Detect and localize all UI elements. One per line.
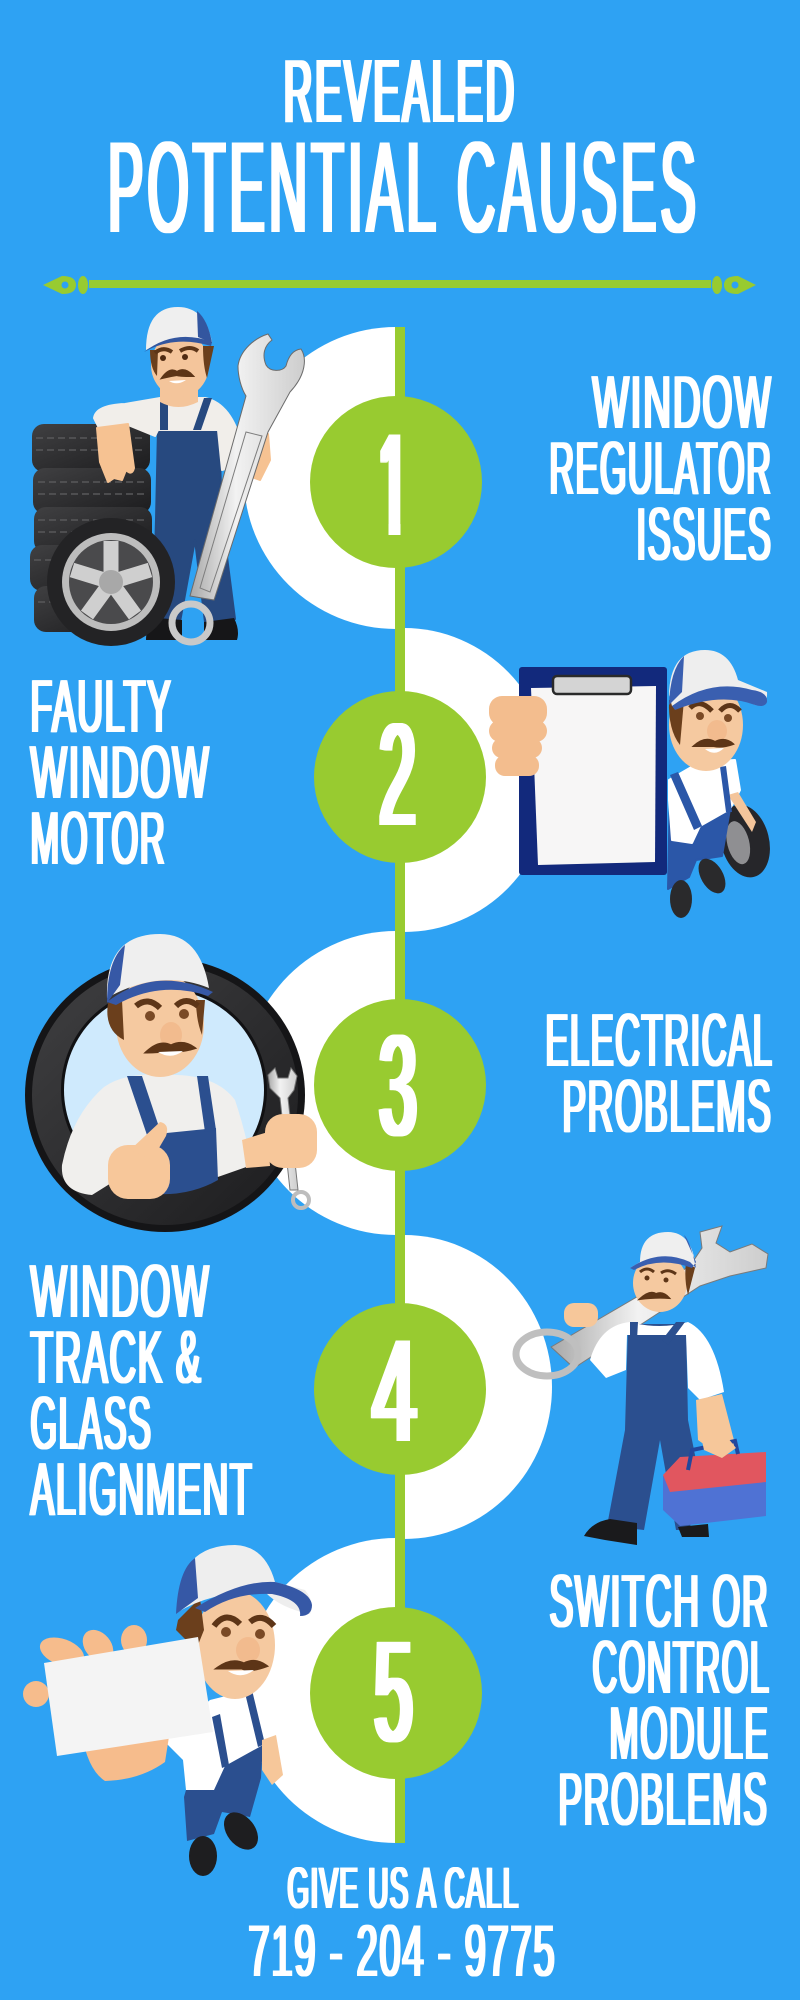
tire bbox=[713, 799, 777, 883]
wrench ring bbox=[293, 1192, 309, 1208]
far arm bbox=[262, 1735, 283, 1785]
straps bbox=[630, 1322, 685, 1345]
arms bbox=[696, 1394, 736, 1456]
face bbox=[640, 1269, 676, 1299]
overalls bbox=[668, 790, 730, 889]
overall straps bbox=[160, 398, 212, 430]
step 4 badge: 4 bbox=[372, 1309, 416, 1472]
step 4 badge bbox=[314, 1303, 486, 1475]
mechanic in tire bbox=[25, 934, 317, 1232]
shoes bbox=[189, 1836, 217, 1876]
head bbox=[195, 1591, 275, 1699]
cause 2 label: FAULTY bbox=[30, 664, 172, 748]
overalls bbox=[147, 1128, 218, 1194]
face bbox=[155, 348, 198, 383]
wrench ring bbox=[172, 604, 210, 642]
clip bbox=[553, 676, 631, 694]
shirt bbox=[62, 1074, 252, 1195]
cause 1 label bbox=[549, 360, 772, 576]
face bbox=[690, 704, 740, 753]
overalls bbox=[184, 1744, 263, 1841]
face bbox=[136, 1001, 198, 1056]
mechanic with clipboard bbox=[489, 650, 777, 918]
shoes bbox=[146, 618, 238, 640]
cause 4 label bbox=[30, 1249, 253, 1531]
shoes bbox=[584, 1519, 709, 1545]
step 5 badge bbox=[310, 1607, 482, 1779]
cause 2 label: WINDOW bbox=[30, 730, 210, 814]
ornamental divider bbox=[43, 276, 756, 294]
paper bbox=[531, 686, 656, 865]
head bbox=[633, 1254, 687, 1312]
cause 4 label: WINDOW bbox=[30, 1249, 210, 1333]
gripping hand bbox=[700, 1428, 736, 1458]
step 1 badge: 1 bbox=[378, 403, 408, 566]
mechanic with big wrench and toolbox bbox=[516, 1226, 768, 1545]
wrench ring bbox=[516, 1332, 578, 1376]
arm bbox=[728, 792, 756, 832]
cause 2 label: MOTOR bbox=[30, 796, 166, 880]
cap bbox=[146, 307, 212, 350]
wheel bbox=[47, 518, 175, 646]
cause 3 label bbox=[545, 998, 773, 1148]
step 5 badge: 5 bbox=[374, 1611, 412, 1772]
white half discs bbox=[244, 327, 552, 1843]
arm and hands bbox=[97, 424, 134, 482]
step 3 badge: 3 bbox=[379, 1005, 416, 1166]
head bbox=[669, 679, 743, 771]
step 3 badge bbox=[314, 999, 486, 1171]
step 2 badge bbox=[314, 691, 486, 863]
cause 4 label: GLASS bbox=[30, 1381, 152, 1465]
toolbox bbox=[663, 1441, 766, 1526]
overalls bbox=[607, 1324, 696, 1530]
hand bbox=[23, 1624, 170, 1781]
step 1 badge bbox=[310, 396, 482, 568]
cause 4 label: TRACK & bbox=[30, 1315, 202, 1399]
legs and overalls bbox=[153, 428, 235, 622]
cause 2 label bbox=[30, 664, 210, 880]
face bbox=[214, 1617, 274, 1675]
shirt bbox=[590, 1322, 724, 1400]
text: ALIGNMENT bbox=[30, 1447, 253, 1531]
hand bbox=[489, 696, 547, 776]
shirt bbox=[669, 760, 740, 843]
step 2 badge: 2 bbox=[379, 693, 415, 856]
cap bbox=[107, 934, 209, 998]
title bbox=[108, 42, 700, 260]
cap bbox=[178, 1545, 312, 1614]
tire stack bbox=[30, 424, 152, 632]
mechanic with tires and wrench bbox=[30, 307, 304, 646]
straps bbox=[670, 766, 732, 830]
holding hand bbox=[242, 1114, 317, 1168]
cause 5 label bbox=[549, 1559, 770, 1841]
shirt bbox=[163, 1690, 275, 1790]
clipboard bbox=[519, 667, 667, 875]
tire ring bbox=[25, 958, 305, 1232]
shoes bbox=[670, 880, 692, 918]
mechanic with blank card bbox=[23, 1545, 312, 1876]
wrench bbox=[551, 1226, 768, 1368]
vertical timeline bbox=[395, 327, 405, 1843]
wrench bbox=[190, 334, 304, 600]
thumbs-up hand bbox=[108, 1122, 170, 1199]
straps bbox=[212, 1690, 265, 1768]
cap bbox=[669, 650, 767, 706]
wrench bbox=[268, 1068, 298, 1190]
head bbox=[116, 973, 204, 1077]
blank card bbox=[44, 1637, 213, 1756]
call to action bbox=[248, 1856, 556, 1992]
call to action: GIVE US A CALL bbox=[287, 1856, 519, 1921]
shirt bbox=[94, 398, 242, 470]
neck and head bbox=[160, 385, 198, 407]
cap bbox=[630, 1232, 696, 1268]
